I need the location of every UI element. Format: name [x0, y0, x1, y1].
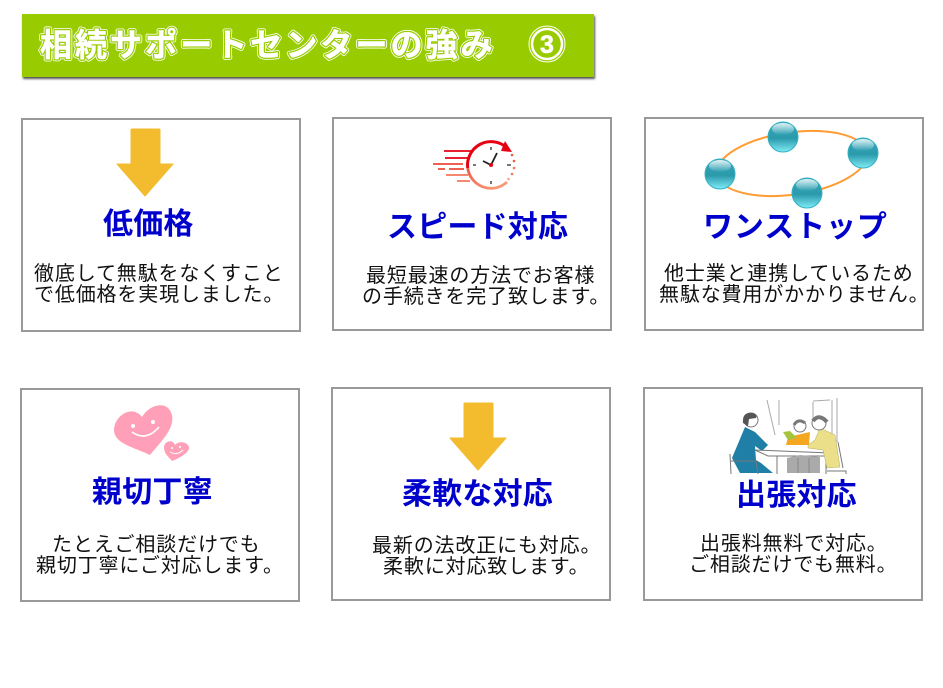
- text: one stop: 無駄な費用がかかりません。: [659, 284, 929, 306]
- text: one stop: 他士業と連携しているため: [664, 263, 914, 285]
- panel: flexible: [331, 387, 611, 601]
- title text: 相続サポートセンターの強み: [40, 27, 496, 63]
- text: on-site visit: ご相談だけでも無料。: [689, 554, 898, 576]
- text: low price: [34, 263, 284, 306]
- panel: one stop: [644, 117, 924, 331]
- heading: one stop: ワンストップ: [703, 211, 888, 244]
- text: low price: 徹底して無駄をなくすこと: [34, 263, 284, 285]
- icon: down arrow: [116, 128, 174, 196]
- text: low price: で低価格を実現しました。: [34, 284, 284, 306]
- icon: speeding clock: [433, 140, 516, 190]
- panel: speed: [332, 117, 612, 331]
- heading: on-site visit: 出張対応: [736, 479, 857, 512]
- heading: low price: 低価格: [103, 208, 194, 241]
- text: kindness: たとえご相談だけでも: [52, 534, 260, 556]
- text: on-site visit: [689, 533, 898, 576]
- text: flexible: 柔軟に対応致します。: [383, 556, 590, 578]
- heading: speed: スピード対応: [387, 211, 568, 244]
- title text: 相続サポートセンターの強み: [40, 27, 496, 63]
- title text: 3: [540, 31, 554, 59]
- text: flexible: 最新の法改正にも対応。: [372, 535, 601, 557]
- icon: smiling hearts: [114, 405, 189, 461]
- icon: down arrow: [450, 402, 506, 470]
- icon: orbit of spheres: [704, 122, 878, 208]
- text: one stop: [659, 263, 929, 306]
- panel: on-site visit: [643, 387, 923, 601]
- title banner: [22, 14, 594, 77]
- text: on-site visit: 出張料無料で対応。: [700, 533, 888, 555]
- panel: kindness: [20, 388, 300, 602]
- panel: low price: [21, 118, 301, 332]
- icon: consultation illustration: [730, 398, 846, 474]
- text: kindness: 親切丁寧にご対応します。: [36, 555, 284, 577]
- heading: flexible: 柔軟な対応: [402, 478, 553, 511]
- text: kindness: [36, 534, 284, 577]
- text: speed: 最短最速の方法でお客様: [366, 265, 595, 287]
- text: speed: [362, 265, 610, 308]
- text: speed: の手続きを完了致します。: [362, 286, 610, 308]
- text: flexible: [372, 535, 601, 578]
- title text: 相続サポートセンターの強み: [40, 27, 496, 63]
- heading: kindness: 親切丁寧: [92, 476, 213, 509]
